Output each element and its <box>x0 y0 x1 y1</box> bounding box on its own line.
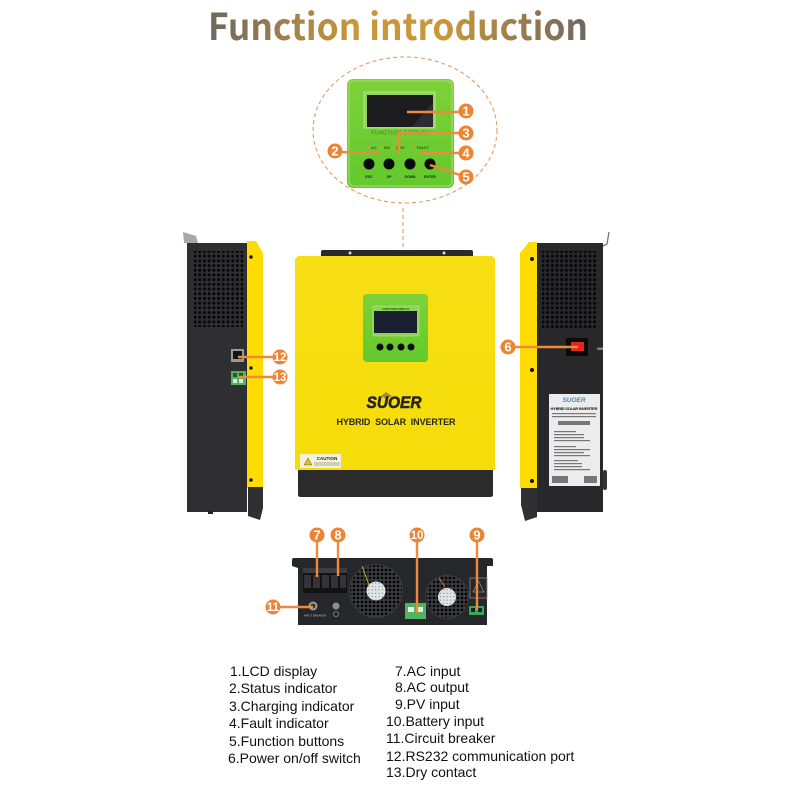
AC terminal block <box>303 568 347 593</box>
legend: items 7 to 13 <box>386 663 574 780</box>
indicator labels: FAULT <box>417 146 430 150</box>
rating label: HYBRID SOLAR INVERTER <box>550 406 598 411</box>
callout 12 <box>238 350 288 364</box>
function buttons <box>364 158 436 170</box>
callout 6 <box>500 340 578 354</box>
dry contact connector <box>231 371 246 385</box>
fan 2 <box>425 575 469 619</box>
legend: items 7 to 13: 10.Battery input <box>386 713 484 729</box>
panel: right side view <box>520 232 609 521</box>
legend: items 7 to 13: 7.AC input <box>395 663 460 679</box>
rating label: SUOER <box>562 397 586 404</box>
callout 9 <box>470 528 484 610</box>
callout 6: 6 <box>504 340 512 354</box>
input breaker caption: INPUT BREAKER <box>304 614 326 618</box>
callout 4: 4 <box>462 146 470 160</box>
callout 3: 3 <box>462 126 470 140</box>
callout 9: 9 <box>473 528 481 542</box>
panel: left side view <box>183 232 263 520</box>
callout 1 <box>407 104 474 118</box>
legend: items 1 to 6: 3.Charging indicator <box>229 698 355 714</box>
PV terminal <box>469 606 484 615</box>
callout 3 <box>399 126 474 153</box>
callout 13: 13 <box>274 372 286 384</box>
callout 10: 10 <box>411 530 423 542</box>
panel: bottom view <box>292 558 493 625</box>
SUOER logo: SUOER <box>366 393 422 412</box>
callout 7 <box>310 528 324 577</box>
indicator labels <box>367 146 430 150</box>
callout 2: 2 <box>331 144 339 158</box>
warning symbol <box>470 578 487 598</box>
button labels: UP <box>387 175 392 179</box>
legend: items 7 to 13: 8.AC output <box>395 679 469 695</box>
callout 4 <box>419 146 474 160</box>
legend: items 1 to 6: 6.Power on/off switch <box>228 750 361 766</box>
callout 10 <box>410 528 424 613</box>
caution label: CAUTION <box>317 456 337 461</box>
fan 1 <box>349 564 403 618</box>
RS232 port <box>231 349 244 362</box>
callout 8 <box>330 528 346 576</box>
legend: items 1 to 6: 4.Fault indicator <box>229 715 329 731</box>
callout 13 <box>238 370 288 384</box>
callout 1: 1 <box>462 104 470 118</box>
button labels: ENTER <box>424 175 436 179</box>
circuit breaker <box>308 602 318 610</box>
caution label <box>300 454 341 468</box>
callout 11 <box>266 600 313 614</box>
front control panel: FUNCTION DISPLAY <box>382 307 410 311</box>
legend: items 1 to 6 <box>228 663 361 766</box>
callout 5 <box>430 165 474 184</box>
indicator labels: INV <box>384 146 391 150</box>
LCD display <box>364 92 435 128</box>
button labels: DOWN <box>404 175 416 179</box>
dashed callout circle with zoom leader <box>313 57 497 287</box>
ground screw <box>332 602 340 616</box>
button labels <box>365 175 436 179</box>
callout 2 <box>328 144 379 158</box>
callout 8: 8 <box>334 528 342 542</box>
battery terminal <box>405 599 426 619</box>
indicator labels: CHG <box>396 146 404 150</box>
power switch <box>566 338 588 356</box>
rating label <box>549 394 600 486</box>
product name: HYBRID SOLAR INVERTER <box>336 417 456 427</box>
front control panel <box>363 294 428 362</box>
legend: items 1 to 6: 5.Function buttons <box>229 733 344 749</box>
legend: items 7 to 13: 12.RS232 communication port <box>386 748 574 764</box>
panel: front view <box>295 250 495 497</box>
panel: enlarged control panel <box>347 79 454 188</box>
legend: items 1 to 6: 1.LCD display <box>230 663 317 679</box>
legend: items 7 to 13: 11.Circuit breaker <box>386 730 496 746</box>
callout 12: 12 <box>274 352 286 364</box>
callout 11: 11 <box>267 602 280 614</box>
legend: items 7 to 13: 9.PV input <box>395 696 460 712</box>
indicator labels: AC <box>371 146 377 150</box>
ON label: ON <box>597 346 603 351</box>
callout 5: 5 <box>462 170 470 184</box>
legend: items 1 to 6: 2.Status indicator <box>229 680 338 696</box>
function display caption: FUNCTION DISPLAY <box>371 130 429 136</box>
button labels: ESC <box>365 175 373 179</box>
callout 7: 7 <box>313 528 321 542</box>
legend: items 7 to 13: 13.Dry contact <box>386 764 476 780</box>
